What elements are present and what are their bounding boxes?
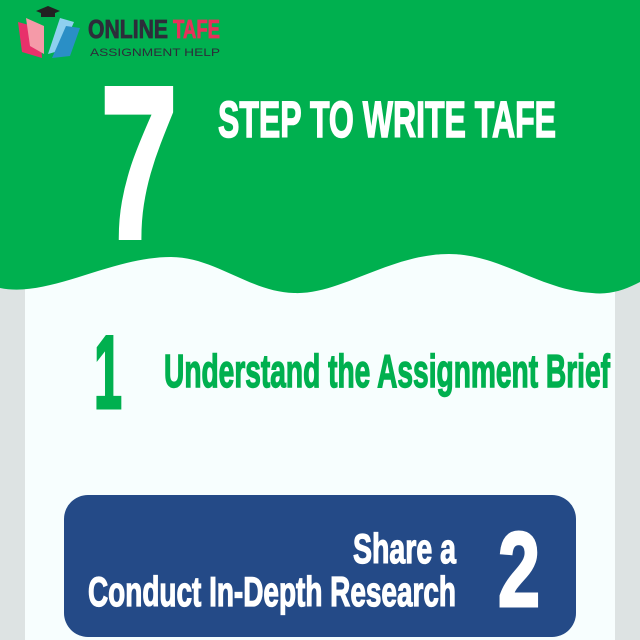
big number 7: 7 bbox=[100, 42, 178, 285]
step 2 label: Share a bbox=[353, 525, 456, 572]
step 2 panel: Conduct In-Depth Research bbox=[88, 568, 456, 615]
logo bbox=[18, 6, 220, 59]
logo: TAFE bbox=[173, 14, 220, 44]
logo: ASSIGNMENT HELP bbox=[90, 47, 220, 59]
step 1: 1 bbox=[94, 315, 122, 431]
step 2 panel bbox=[64, 495, 576, 637]
logo text: ONLINE bbox=[88, 14, 168, 44]
step 2 number: 2 bbox=[498, 511, 540, 629]
icon: open book with cap bbox=[18, 6, 80, 58]
header green wave bbox=[0, 0, 640, 293]
step 1 bbox=[94, 315, 610, 431]
